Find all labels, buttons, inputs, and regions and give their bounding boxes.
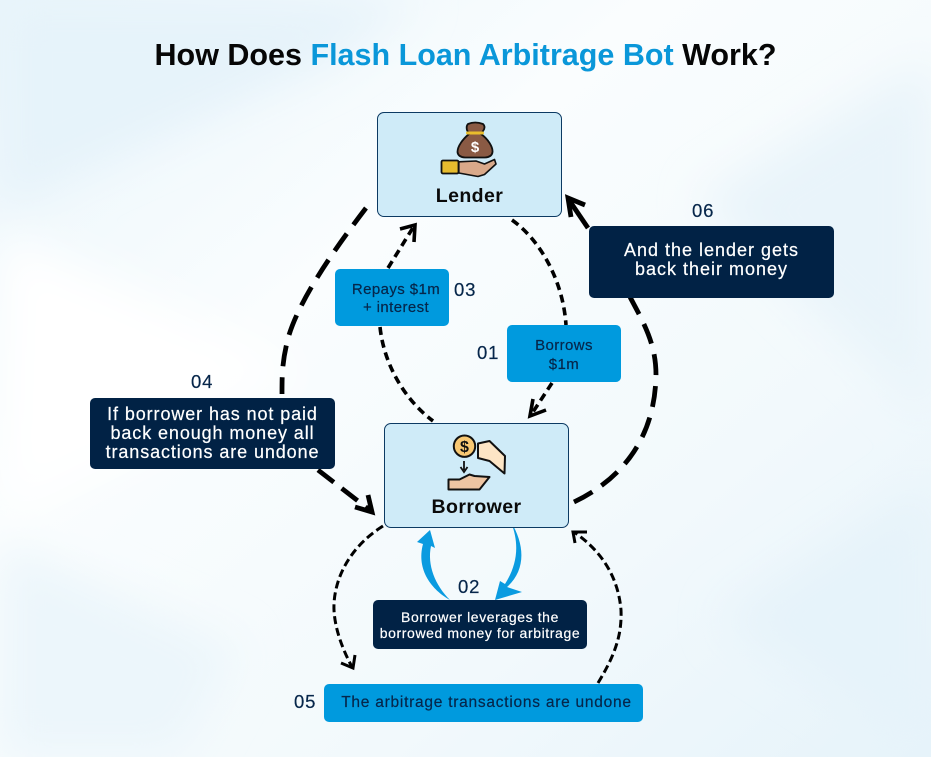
box: lender gets money back: And the lender gets back their money: [624, 240, 799, 279]
title: How Does Flash Loan Arbitrage Bot Work?: [155, 38, 776, 72]
node: lender: [377, 112, 562, 217]
step 03: [335, 269, 476, 326]
step 01: [477, 325, 621, 382]
arrow 05: borrower to arbitrage box: [334, 526, 383, 668]
number 04: 04: [191, 371, 213, 392]
box: repays: Repays $1m + interest: [352, 280, 440, 316]
arrow 03: borrower to lender: [380, 225, 433, 421]
box: lender gets money back: [589, 226, 834, 298]
number 02: 02: [458, 576, 480, 597]
box: leverage: [373, 600, 587, 649]
icon: money bag on hand: [440, 122, 497, 178]
arrow 04: lender to borrower long dash: [282, 208, 372, 512]
box: borrows: Borrows $1m: [535, 336, 593, 372]
number 05: 05: [294, 691, 316, 712]
box: undone warning: If borrower has not paid back enough money all transactions are undone: [106, 404, 319, 462]
icon: coin and hands: [448, 434, 506, 490]
number 03: 03: [454, 279, 476, 300]
box: repays: [335, 269, 449, 326]
number 06: 06: [692, 200, 714, 221]
box: leverage: Borrower leverages the borrowed money for arbitrage: [380, 608, 580, 640]
step 05: [294, 684, 643, 722]
arrow 06: borrower to lender long dash: [568, 198, 656, 502]
step 04: [90, 371, 335, 469]
icon: money bag on hand: $: [471, 139, 480, 156]
number 01: 01: [477, 342, 499, 363]
box: transactions undone: The arbitrage transactions are undone: [341, 694, 632, 711]
box: borrows: [507, 325, 621, 382]
icon: coin and hands: $: [460, 439, 469, 456]
step 02: [373, 576, 587, 649]
label: Lender: Lender: [436, 185, 503, 207]
arrow 01: lender to borrower: [512, 220, 566, 416]
node: borrower: [384, 423, 569, 528]
arrow 05 return: [573, 532, 621, 683]
step 06: [589, 200, 834, 298]
label: Borrower: Borrower: [432, 496, 521, 518]
box: transactions undone: [324, 684, 643, 722]
